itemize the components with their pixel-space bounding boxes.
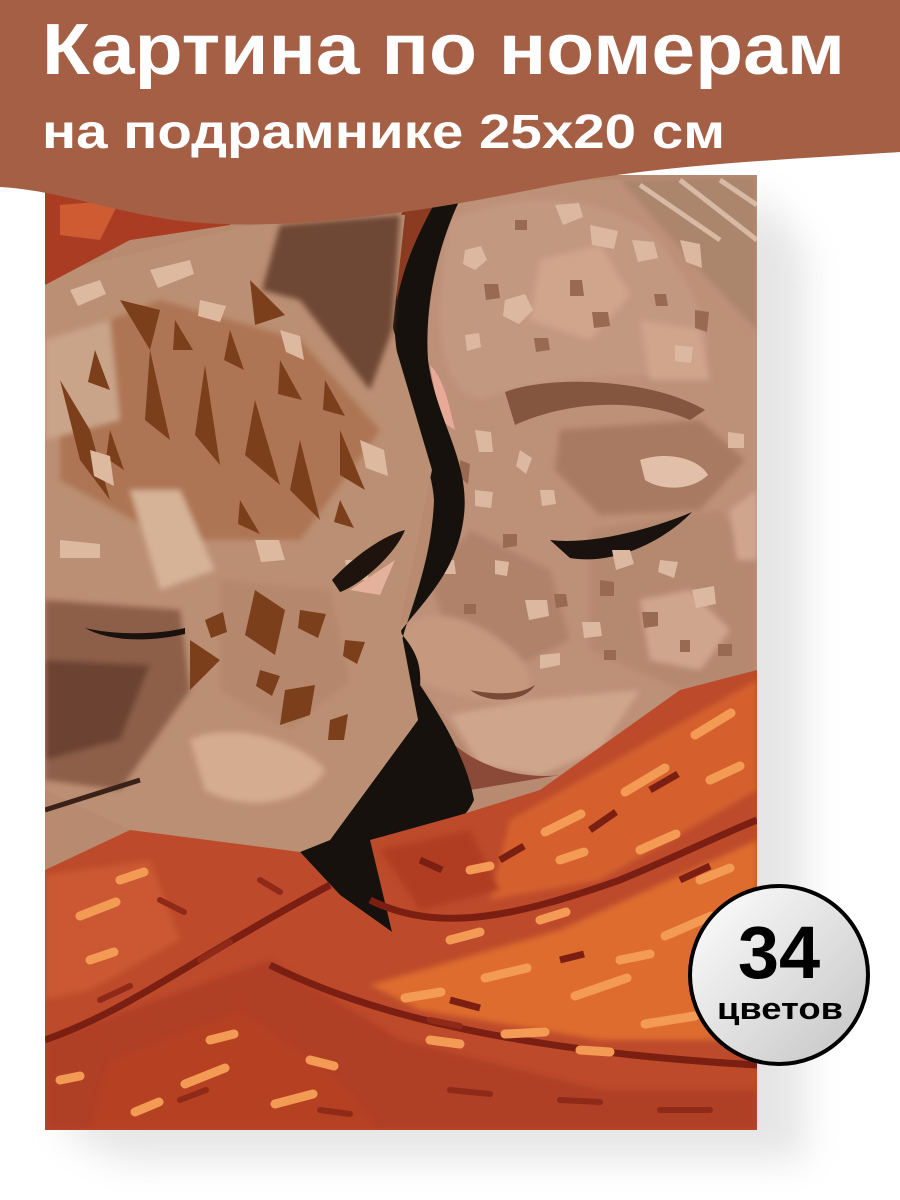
title: Картина по номерам — [42, 10, 845, 90]
freckles — [440, 203, 744, 669]
cat fur — [45, 215, 432, 852]
badge: 34 colours — [690, 886, 868, 1064]
knitted scarf — [45, 670, 757, 1130]
cheek pink mark — [430, 365, 455, 430]
header band — [0, 0, 900, 224]
dark hair line — [300, 195, 474, 932]
cat stripes — [60, 280, 365, 740]
nostril and lip — [470, 685, 535, 700]
hair strands top right — [640, 180, 757, 240]
top left scarf — [45, 190, 240, 285]
light fur dabs — [60, 260, 388, 580]
eyebrow — [505, 382, 705, 425]
cat eyes — [85, 628, 185, 639]
eyelashes — [550, 512, 692, 559]
knit highlights — [60, 713, 740, 1112]
whiskers — [45, 780, 140, 810]
canvas shadow — [60, 190, 805, 1160]
painting: girl and cat — [45, 175, 757, 1130]
scarf folds — [45, 774, 757, 1065]
subtitle: на подрамнике 25х20 см — [42, 106, 725, 159]
badge: 34 colours: 34 — [738, 911, 820, 994]
girl face — [395, 175, 757, 790]
badge: 34 colours: цветов — [717, 991, 843, 1026]
eyelid highlight — [640, 456, 708, 488]
